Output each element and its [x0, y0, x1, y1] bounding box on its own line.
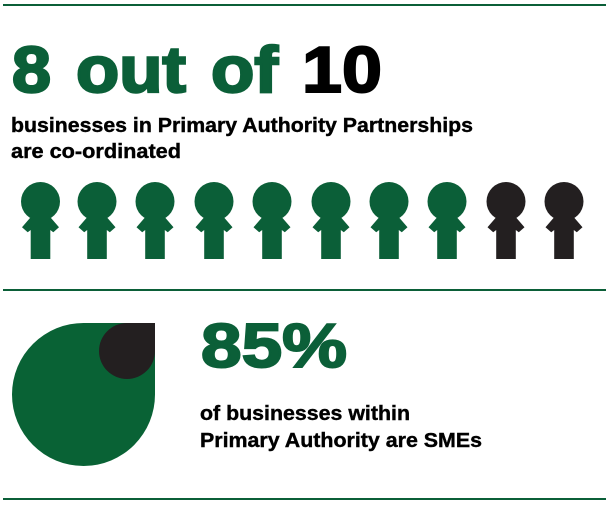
heading: 8 out of 10: out [76, 33, 186, 106]
heading: 8 out of 10: 10 [302, 33, 382, 106]
chart: 85% teardrop [12, 323, 155, 466]
heading: 8 out of 10 [12, 33, 382, 106]
heading: 8 out of 10: 8 [12, 33, 51, 106]
heading: 8 out of 10: of [211, 33, 278, 106]
text: of businesses within: of businesses within [200, 403, 410, 425]
text: Primary Authority are SMEs: Primary Authority are SMEs [200, 430, 482, 452]
text: are co-ordinated: are co-ordinated [11, 141, 181, 163]
pictogram: 8 of 10 people [21, 182, 584, 259]
text: businesses in Primary Authority Partnerships: businesses in Primary Authority Partnerships [11, 115, 473, 137]
stat: 85%: 85% [201, 312, 347, 381]
